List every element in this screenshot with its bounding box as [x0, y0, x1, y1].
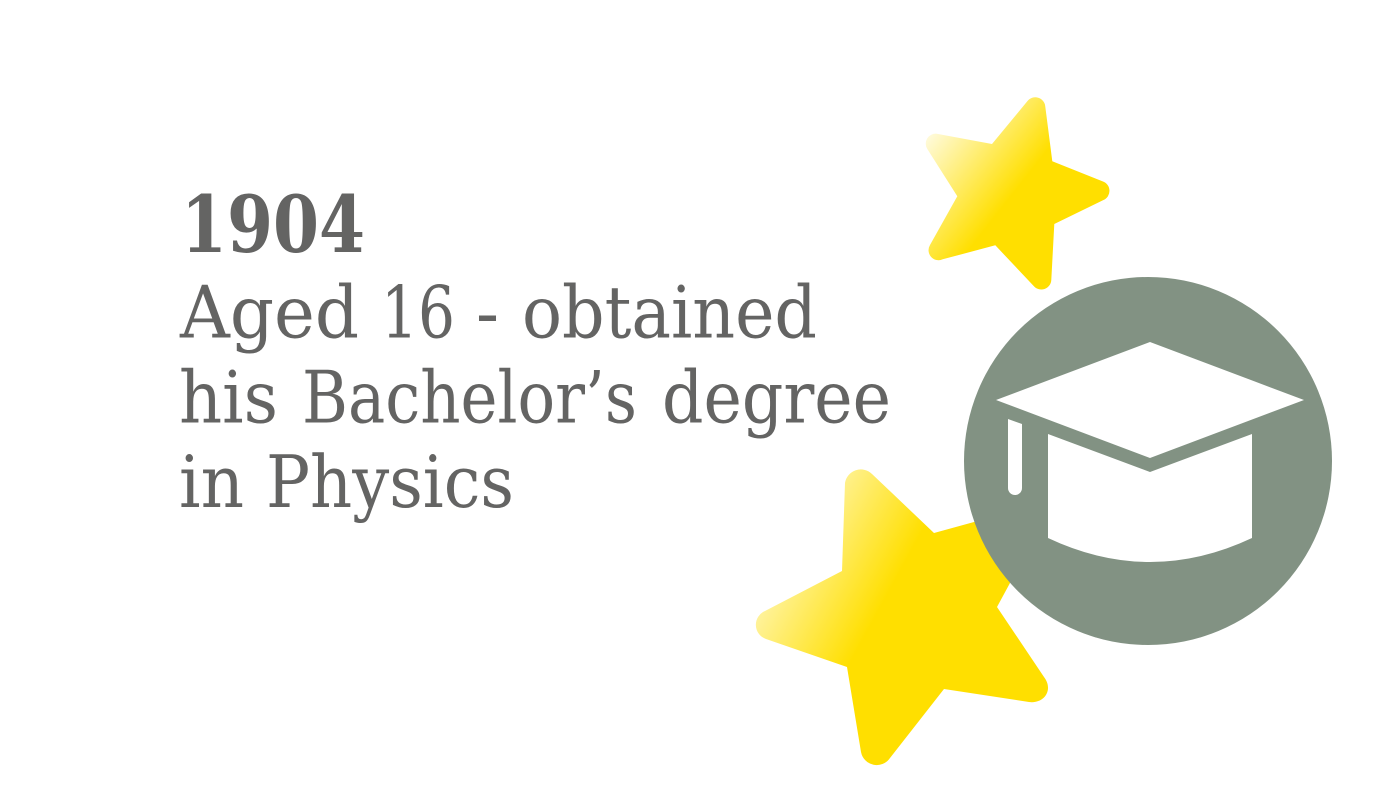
text block: description: degree	[662, 356, 891, 440]
text block: description: -	[476, 270, 499, 354]
icon: small star	[926, 97, 1109, 290]
text block: description: Aged	[179, 270, 359, 354]
mortarboard top	[996, 342, 1304, 458]
badge circle	[964, 277, 1332, 645]
text block: description: 16	[381, 270, 455, 354]
icon: large star	[756, 469, 1048, 765]
cap body	[1048, 434, 1252, 562]
tassel	[1008, 419, 1022, 495]
text block: description: obtained	[522, 270, 817, 354]
text block: description: Physics	[266, 440, 514, 524]
icon: graduation cap badge	[964, 277, 1332, 645]
text block: description: Bachelor’s	[302, 356, 637, 440]
text block: description	[179, 270, 891, 524]
heading: year: 1904	[181, 178, 365, 271]
text block: description: in	[179, 440, 244, 524]
text block: description: his	[179, 356, 278, 440]
